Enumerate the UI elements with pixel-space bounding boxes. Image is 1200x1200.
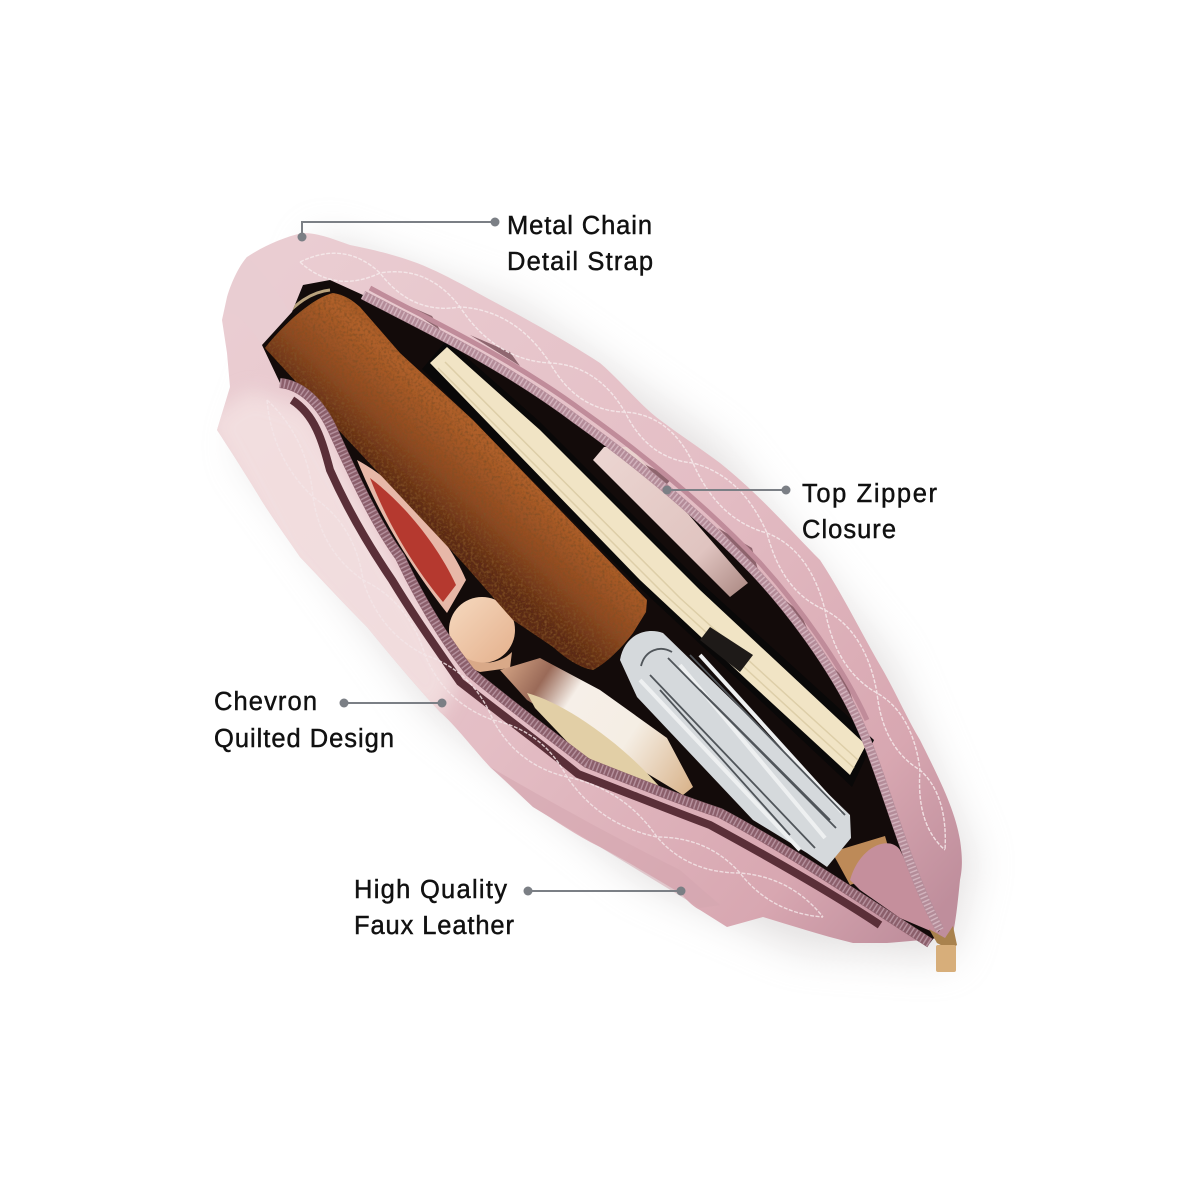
brown leather roll: [265, 293, 647, 670]
pink corner puff: [850, 843, 940, 935]
folded corner crease: [224, 257, 290, 345]
lipstick base: [455, 650, 512, 672]
book pages: [430, 347, 866, 775]
illustration: quilted pink pouch with contents: [205, 233, 962, 972]
rose compact: [357, 460, 466, 613]
lower zipper: [280, 383, 930, 943]
callout: high quality faux leather: High Quality: [354, 876, 507, 904]
tan fabric in corner: [835, 836, 888, 885]
callout: top zipper closure: Closure: [802, 516, 896, 544]
back panel shading: [490, 767, 720, 908]
wallet fold highlights: [640, 655, 842, 850]
black book cover: [422, 340, 874, 787]
gold compact ring: [500, 658, 693, 795]
chain ring detail: [292, 288, 330, 310]
wallet folds: [641, 649, 845, 848]
bag shadow: [240, 235, 975, 960]
pouch outer body: [217, 233, 962, 943]
gold compact face: [527, 693, 664, 792]
top rim stitching: [300, 253, 945, 850]
callout: high quality faux leather: Faux Leather: [354, 912, 514, 940]
callout: top zipper closure: [662, 480, 938, 544]
zipper pull: [929, 926, 957, 972]
callout: top zipper closure: Top Zipper: [802, 480, 938, 508]
callout: chevron quilted design: [214, 688, 446, 753]
callout: metal chain detail strap: Detail Strap: [507, 248, 653, 276]
callout: metal chain detail strap: Metal Chain: [507, 212, 652, 240]
top lining band: [370, 288, 867, 720]
elastic band: [700, 627, 753, 672]
pink lining strip: [868, 740, 908, 815]
pink case behind book: [593, 447, 748, 597]
page lines: [438, 362, 858, 768]
pouch interior: [262, 280, 940, 943]
lower rim stitching: [267, 400, 823, 917]
pale left panel: [205, 390, 460, 730]
callout: chevron quilted design: Chevron: [214, 688, 317, 716]
white wallet: [620, 631, 851, 867]
top zipper: [363, 295, 940, 930]
lipstick cap: [449, 597, 515, 663]
lower lining band: [292, 400, 880, 925]
callout: high quality faux leather: [354, 876, 686, 940]
rim scallop shadows: [395, 300, 856, 710]
callout: chevron quilted design: Quilted Design: [214, 725, 394, 753]
callout: metal chain detail strap: [298, 212, 653, 276]
